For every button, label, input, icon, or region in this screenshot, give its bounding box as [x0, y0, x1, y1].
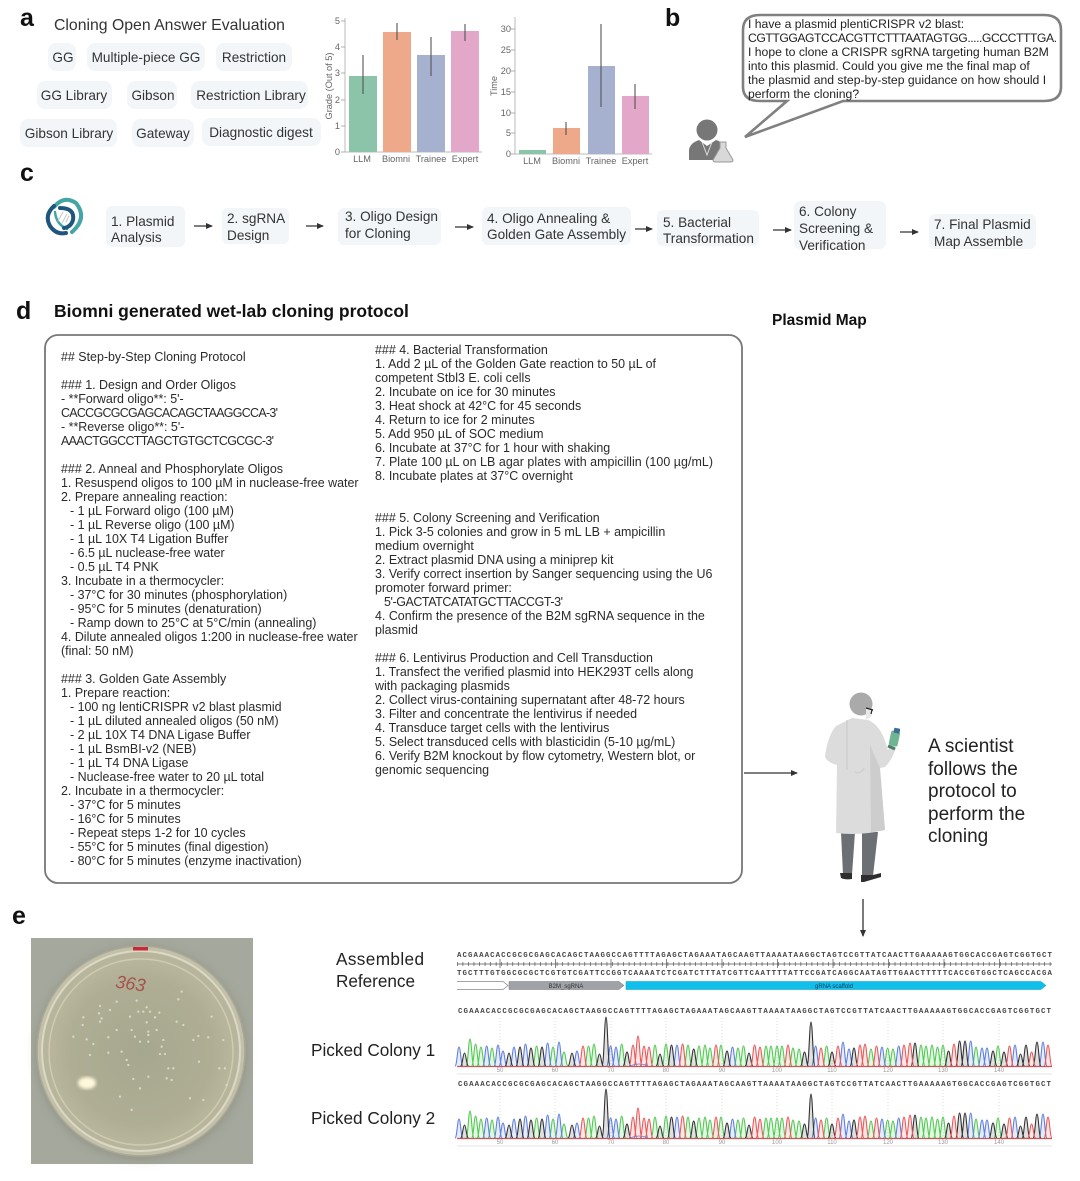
photo: petri dish with colonies	[31, 938, 253, 1164]
step 5: Bacterial Transformation: Transformation	[663, 231, 754, 246]
chromatogram: picked colony 1: 130	[938, 1068, 949, 1074]
protocol text column 2: 4. Transduce target cells with the lentivirus	[375, 721, 609, 735]
speech bubble with user prompt: CGTTGGAGTCCACGTTCTTTAATAGTGG.....GCCCTTTGA.	[748, 31, 1057, 45]
bar: LLM	[519, 150, 546, 154]
chromatogram: picked colony 2: 70	[608, 1140, 615, 1146]
bar chart: time: LLM	[523, 156, 541, 166]
bar chart: time: Expert	[622, 156, 649, 166]
heading: Cloning Open Answer Evaluation: Cloning Open Answer Evaluation	[54, 17, 285, 34]
step 3: Oligo Design for Cloning: 3. Oligo Design	[345, 209, 438, 224]
bar chart: grade out of 5: LLM	[353, 154, 371, 164]
step 1: Plasmid Analysis: 1. Plasmid	[111, 214, 174, 229]
protocol text column 1: - **Forward oligo**: 5'-	[61, 392, 184, 406]
protocol text column 1: CACCGCGCGAGCACAGCTAAGGCCA-3'	[61, 406, 278, 420]
text: scientist caption: perform the	[928, 804, 1025, 825]
speech bubble with user prompt: into this plasmid. Could you give me the final map of	[748, 59, 1030, 73]
icon: scientist with flask	[689, 120, 733, 162]
chip: GG Library: GG Library	[41, 88, 107, 103]
bar chart: grade out of 5: Expert	[452, 154, 479, 164]
bar chart: grade out of 5: 0	[335, 147, 340, 157]
chip: Diagnostic digest: Diagnostic digest	[209, 125, 313, 140]
bar chart: time: 5	[506, 128, 511, 138]
bar chart: grade out of 5	[324, 16, 482, 164]
protocol text column 2: 3. Filter and concentrate the lentivirus if needed	[375, 707, 637, 721]
arrow 4 to 5	[635, 228, 652, 230]
chip: Restriction Library	[191, 81, 308, 109]
colonies	[73, 992, 227, 1110]
bar: Trainee	[588, 66, 615, 154]
protocol text column 1: - 0.5 µL T4 PNK	[70, 560, 159, 574]
labels: sequencing rows: Reference	[336, 971, 415, 991]
sequence map: assembled reference	[457, 952, 1053, 990]
sequence map: assembled reference: ACGAAACACCGCGCGAGCACAGCTAAGGCCAGTTTTAGAGCTAGAAATAGCAAGTTAAAATAAGGCTAGTCCGTTATCAACTTGAAAAAGTGGCACCGAGTCGGTGCT	[457, 952, 1053, 960]
step 1: Plasmid Analysis: Analysis	[111, 230, 162, 245]
bar: Trainee	[417, 55, 445, 152]
panel b label: b	[665, 4, 680, 32]
panel a label: a	[20, 4, 35, 32]
bar: Biomni	[383, 32, 411, 152]
protocol text column 1: 2. Prepare annealing reaction:	[61, 490, 228, 504]
bar chart: grade out of 5: 2	[335, 95, 340, 105]
protocol text column 1: - Nuclease-free water to 20 µL total	[70, 770, 264, 784]
protocol text column 2: 7. Plate 100 µL on LB agar plates with ampicillin (100 µg/mL)	[375, 455, 713, 469]
protocol text column 1: 1. Prepare reaction:	[61, 686, 170, 700]
protocol text column 2: 2. Incubate on ice for 30 minutes	[375, 385, 555, 399]
arrow 1 to 2	[194, 225, 212, 227]
arrow 5 to 6	[773, 229, 791, 231]
chromatogram: picked colony 1: CGAAACACCGCGCGAGCACAGCTAAGGCCAGTTTTAGAGCTAGAAATAGCAAGTTAAAATAAGGCTAGTCCGTTATCAACTTGAAAAAGTGGCACCGAGTCGGTGCT	[458, 1008, 1052, 1016]
chromatogram: picked colony 2: 130	[938, 1140, 949, 1146]
protocol text column 1: - 6.5 µL nuclease-free water	[70, 546, 225, 560]
protocol text column 1: ### 2. Anneal and Phosphorylate Oligos	[61, 462, 283, 476]
protocol text column 2: ### 4. Bacterial Transformation	[375, 343, 548, 357]
protocol text column 2: ### 5. Colony Screening and Verification	[375, 511, 600, 525]
chromatogram: picked colony 1: 120	[883, 1068, 894, 1074]
protocol text column 1: - 37°C for 30 minutes (phosphorylation)	[70, 588, 287, 602]
text: scientist caption: protocol to	[928, 781, 1017, 802]
chromatogram: picked colony 1: 140	[994, 1068, 1005, 1074]
step 6: Colony Screening and Verification: Verification	[799, 238, 866, 253]
step 4: Oligo Annealing and Golden Gate Assembly: Golden Gate Assembly	[487, 227, 626, 242]
protocol text column 2: 4. Return to ice for 2 minutes	[375, 413, 535, 427]
step 1: Plasmid Analysis	[106, 206, 185, 247]
protocol text column 2: 1. Transfect the verified plasmid into HEK293T cells along	[375, 665, 694, 679]
chromatogram: picked colony 1: 60	[552, 1068, 559, 1074]
protocol text column 2: 5'-GACTATCATATGCTTACCGT-3'	[384, 595, 563, 609]
chip: Gibson: Gibson	[131, 88, 175, 103]
step 4: Oligo Annealing and Golden Gate Assembly: 4. Oligo Annealing &	[487, 211, 610, 226]
protocol text column 1: (final: 50 nM)	[61, 644, 134, 658]
labels: sequencing rows	[311, 949, 435, 1128]
chromatogram: picked colony 2: 120	[883, 1140, 894, 1146]
protocol text column 2	[374, 343, 713, 777]
protocol text column 2: promoter forward primer:	[375, 581, 512, 595]
step 3: Oligo Design for Cloning: for Cloning	[345, 226, 411, 241]
protocol text column 2: genomic sequencing	[375, 763, 489, 777]
protocol text column 2: plasmid	[375, 623, 418, 637]
bar chart: grade out of 5: 1	[335, 121, 340, 131]
protocol text column 1	[61, 350, 359, 868]
speech bubble with user prompt: the plasmid and step-by-step guidance on how should I	[748, 73, 1046, 87]
chromatogram: picked colony 1	[455, 1008, 1052, 1074]
sequence map: assembled reference: TGCTTTGTGGCGCGCTCGTGTCGATTCCGGTCAAAATCTCGATCTTTATCGTTCAATTTTATTCCGATCAGGCAATAGTTGAACTTTTTCACCGTGGCTCAGCCACGA	[457, 970, 1053, 978]
feature arrow: gRNA scaffold: gRNA scaffold	[815, 984, 853, 990]
chip: Gateway	[132, 119, 194, 147]
chip: Restriction	[216, 43, 292, 71]
chip: Multiple-piece GG	[87, 43, 205, 71]
protocol text column 1: - 1 µL T4 DNA Ligase	[70, 756, 189, 770]
protocol text column 1: - 16°C for 5 minutes	[70, 812, 181, 826]
chromatogram: picked colony 1: 90	[719, 1068, 726, 1074]
protocol text column 1: - 55°C for 5 minutes (final digestion)	[70, 840, 269, 854]
chromatogram: picked colony 2: 140	[994, 1140, 1005, 1146]
protocol text column 2: 3. Verify correct insertion by Sanger sequencing using the U6	[375, 567, 712, 581]
protocol text column 2: 8. Incubate plates at 37°C overnight	[375, 469, 573, 483]
labels: sequencing rows: Picked Colony 2	[311, 1108, 435, 1128]
protocol text column 1: - Ramp down to 25°C at 5°C/min (annealing)	[70, 616, 316, 630]
bar chart: time	[489, 17, 652, 166]
bar: Expert	[622, 96, 649, 154]
illustration: scientist in lab coat	[825, 692, 900, 882]
chip: GG: GG	[52, 50, 74, 65]
bar chart: grade out of 5: Trainee	[416, 154, 446, 164]
protocol text column 1: ## Step-by-Step Cloning Protocol	[61, 350, 246, 364]
chromatogram: picked colony 1: 100	[772, 1068, 783, 1074]
speech bubble with user prompt: perform the cloning?	[748, 87, 859, 101]
protocol text column 2: 2. Extract plasmid DNA using a miniprep kit	[375, 553, 614, 567]
bar chart: time: Biomni	[552, 156, 580, 166]
chromatogram: picked colony 2: 110	[827, 1140, 837, 1146]
step 6: Colony Screening and Verification	[794, 201, 886, 253]
protocol text column 1: - 1 µL Reverse oligo (100 µM)	[70, 518, 235, 532]
chip: Gateway: Gateway	[136, 126, 190, 141]
step 6: Colony Screening and Verification: 6. Colony	[799, 204, 857, 219]
chip: Gibson	[127, 81, 177, 109]
bar chart: time: Time	[489, 76, 499, 96]
chromatogram: picked colony 1: 50	[497, 1068, 504, 1074]
protocol text column 1: - Repeat steps 1-2 for 10 cycles	[70, 826, 246, 840]
protocol text column 1: 1. Resuspend oligos to 100 µM in nuclease-free water	[61, 476, 359, 490]
protocol text column 2: competent Stbl3 E. coli cells	[375, 371, 531, 385]
panel: protocol box	[45, 335, 742, 883]
bar: Expert	[451, 31, 479, 152]
photo: petri dish with colonies: 363	[114, 972, 147, 996]
panel d label: d	[16, 297, 31, 325]
protocol text column 1: - 95°C for 5 minutes (denaturation)	[70, 602, 262, 616]
protocol text column 1: 2. Incubate in a thermocycler:	[61, 784, 224, 798]
step 7: Final Plasmid Map Assemble	[929, 214, 1036, 249]
labels: sequencing rows: Picked Colony 1	[311, 1040, 435, 1060]
protocol text column 2: 6. Verify B2M knockout by flow cytometry, Western blot, or	[375, 749, 695, 763]
bar chart: grade out of 5: 5	[335, 16, 340, 26]
protocol text column 1: ### 3. Golden Gate Assembly	[61, 672, 227, 686]
chromatogram: picked colony 2: 50	[497, 1140, 504, 1146]
protocol text column 2: 2. Collect virus-containing supernatant after 48-72 hours	[375, 693, 685, 707]
chip: Diagnostic digest	[202, 118, 321, 146]
chromatogram: picked colony 2: CGAAACACCGCGCGAGCACAGCTAAGGCCAGTTTTAGAGCTAGAAATAGCAAGTTAAAATAAGGCTAGTCCGTTATCAACTTGAAAAAGTGGCACCGAGTCGGTGCT	[458, 1081, 1052, 1089]
step 2: sgRNA Design: 2. sgRNA	[227, 211, 286, 226]
protocol text column 2: 1. Pick 3-5 colonies and grow in 5 mL LB + ampicillin	[375, 525, 665, 539]
bar chart: grade out of 5: 4	[335, 42, 340, 52]
chromatogram: picked colony 1: 80	[663, 1068, 670, 1074]
bar chart: time: 20	[501, 66, 511, 76]
protocol text column 1: - 80°C for 5 minutes (enzyme inactivation)	[70, 854, 302, 868]
protocol text column 1: - 37°C for 5 minutes	[70, 798, 181, 812]
protocol text column 1: ### 1. Design and Order Oligos	[61, 378, 236, 392]
chip: Restriction: Restriction	[222, 50, 286, 65]
bar: LLM	[349, 76, 377, 152]
protocol text column 1: - 100 ng lentiCRISPR v2 blast plasmid	[70, 700, 282, 714]
step 5: Bacterial Transformation: 5. Bacterial	[663, 215, 731, 230]
heading: protocol title: Biomni generated wet-lab cloning protocol	[54, 301, 409, 321]
protocol text column 1: 4. Dilute annealed oligos 1:200 in nuclease-free water	[61, 630, 358, 644]
protocol text column 1: AAACTGGCCTTAGCTGTGCTCGCGC-3'	[61, 434, 274, 448]
bar chart: time: Trainee	[586, 156, 616, 166]
chip: Restriction Library: Restriction Library	[196, 88, 306, 103]
protocol text column 1: - 1 µL BsmBI-v2 (NEB)	[70, 742, 196, 756]
protocol text column 2: 6. Incubate at 37°C for 1 hour with shaking	[375, 441, 610, 455]
bar chart: grade out of 5: Grade (Out of 5)	[324, 53, 334, 119]
panel c label: c	[20, 159, 34, 187]
icon: Biomni logo	[48, 200, 81, 233]
panel e label: e	[12, 902, 26, 930]
feature arrow: B2M_sgRNA: B2M_sgRNA	[549, 984, 583, 990]
chip: GG	[48, 43, 76, 71]
chip: GG Library	[37, 81, 112, 109]
step 4: Oligo Annealing and Golden Gate Assembly	[482, 207, 631, 245]
arrow: scientist to results	[862, 899, 864, 936]
chromatogram: picked colony 2: 100	[772, 1140, 783, 1146]
chip: Gibson Library: Gibson Library	[25, 126, 113, 141]
speech bubble with user prompt	[743, 15, 1061, 137]
panel a: cloning task list	[20, 17, 321, 147]
bar chart: time: 15	[501, 87, 511, 97]
protocol text column 2: with packaging plasmids	[374, 679, 510, 693]
protocol text column 1: 3. Incubate in a thermocycler:	[61, 574, 224, 588]
bar chart: time: 25	[501, 45, 511, 55]
text: scientist caption: cloning	[928, 826, 988, 847]
step 7: Final Plasmid Map Assemble: Map Assemble	[934, 234, 1023, 249]
step 7: Final Plasmid Map Assemble: 7. Final Plasmid	[934, 217, 1031, 232]
speech bubble with user prompt: I hope to clone a CRISPR sgRNA targeting human B2M	[748, 45, 1049, 59]
chip: Multiple-piece GG: Multiple-piece GG	[92, 50, 200, 65]
bar chart: time: 10	[501, 108, 511, 118]
arrow 2 to 3	[306, 225, 323, 227]
protocol text column 2: 1. Add 2 µL of the Golden Gate reaction to 50 µL of	[375, 357, 657, 371]
speech bubble with user prompt: I have a plasmid plentiCRISPR v2 blast:	[748, 17, 964, 31]
chip: Gibson Library	[20, 119, 117, 147]
protocol text column 2: 3. Heat shock at 42°C for 45 seconds	[375, 399, 581, 413]
protocol text column 2: medium overnight	[375, 539, 474, 553]
step 2: sgRNA Design: Design	[227, 228, 269, 243]
feature arrow: gRNA scaffold	[626, 982, 1046, 990]
text: scientist caption	[928, 736, 1025, 847]
bar chart: time: 0	[506, 149, 511, 159]
arrow: protocol to scientist	[744, 772, 797, 774]
step 5: Bacterial Transformation	[657, 210, 759, 246]
bar chart: grade out of 5: 3	[335, 68, 340, 78]
protocol text column 2: 4. Confirm the presence of the B2M sgRNA sequence in the	[375, 609, 705, 623]
bar: Biomni	[553, 128, 580, 154]
text: scientist caption: A scientist	[928, 736, 1014, 757]
protocol text column 1: - 2 µL 10X T4 DNA Ligase Buffer	[70, 728, 250, 742]
protocol text column 2: 5. Add 950 µL of SOC medium	[375, 427, 543, 441]
chromatogram: picked colony 2: 80	[663, 1140, 670, 1146]
protocol text column 2: ### 6. Lentivirus Production and Cell Transduction	[375, 651, 653, 665]
chromatogram: picked colony 2: 60	[552, 1140, 559, 1146]
chromatogram: picked colony 2: 90	[719, 1140, 726, 1146]
protocol text column 1: - 1 µL diluted annealed oligos (50 nM)	[70, 714, 279, 728]
protocol text column 1: - 1 µL 10X T4 Ligation Buffer	[70, 532, 228, 546]
chromatogram: picked colony 1: 70	[608, 1068, 615, 1074]
heading: Plasmid Map: Plasmid Map	[772, 312, 867, 329]
chromatogram: picked colony 2	[455, 1081, 1052, 1146]
chromatogram: picked colony 1: 110	[827, 1068, 837, 1074]
arrow 3 to 4	[455, 226, 473, 228]
bar chart: time: 30	[501, 24, 511, 34]
arrow 6 to 7	[900, 231, 918, 233]
protocol text column 1: - 1 µL Forward oligo (100 µM)	[70, 504, 234, 518]
step 2: sgRNA Design	[222, 208, 289, 244]
step 6: Colony Screening and Verification: Screening &	[799, 221, 873, 236]
step 3: Oligo Design for Cloning	[338, 208, 441, 245]
protocol text column 1: - **Reverse oligo**: 5'-	[61, 420, 184, 434]
protocol text column 2: 5. Select transduced cells with blasticidin (5-10 µg/mL)	[375, 735, 675, 749]
labels: sequencing rows: Assembled	[336, 949, 424, 969]
feature arrow: upstream	[457, 982, 508, 990]
text: scientist caption: follows the	[928, 759, 1018, 780]
bar chart: grade out of 5: Biomni	[382, 154, 410, 164]
feature arrow: B2M_sgRNA	[509, 982, 624, 990]
